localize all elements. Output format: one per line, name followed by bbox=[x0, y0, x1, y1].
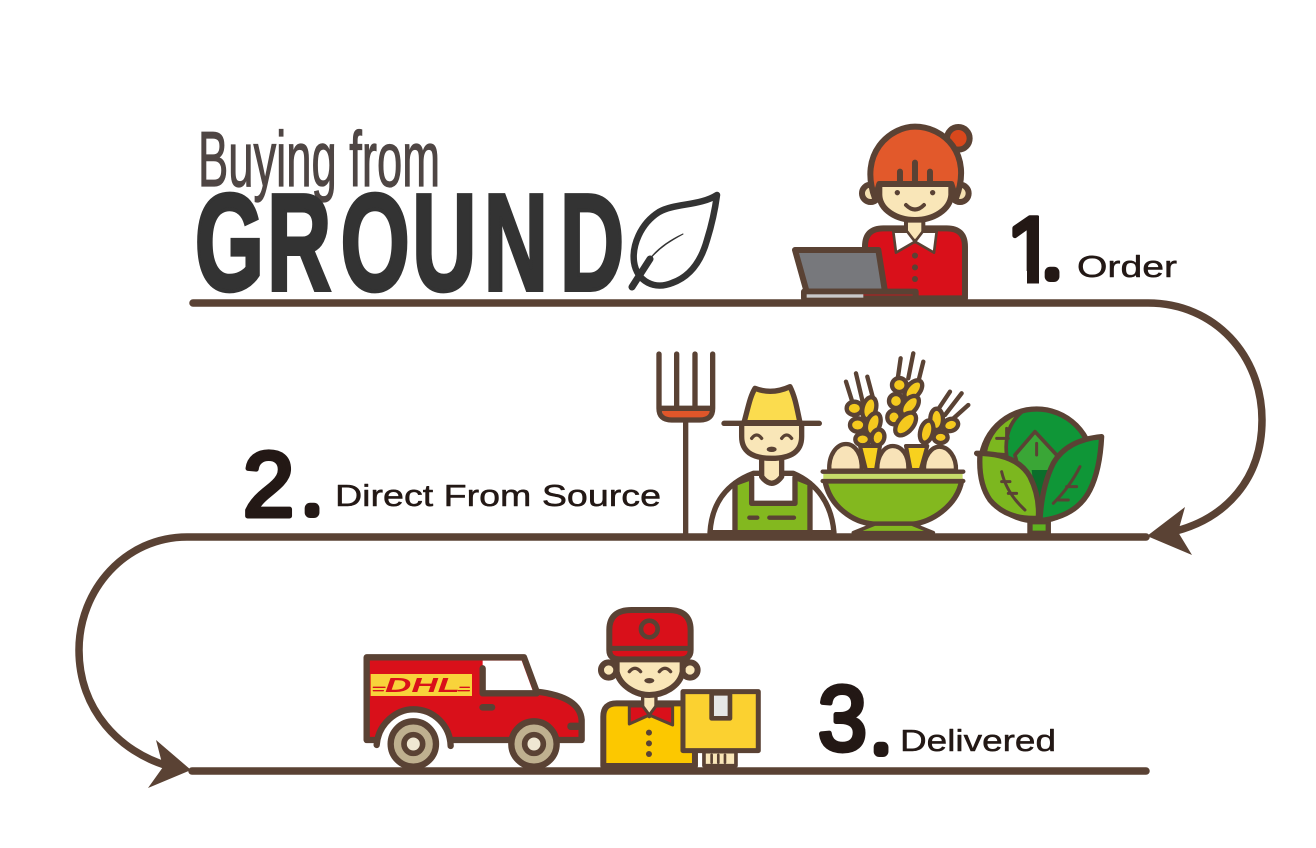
arrowhead: right curve bbox=[1147, 507, 1192, 555]
icon: DHL delivery van bbox=[367, 657, 582, 767]
number 3: 3 bbox=[818, 668, 867, 770]
collar bbox=[629, 706, 673, 725]
icon: woman at laptop bbox=[795, 127, 970, 298]
parcel tape bbox=[712, 693, 730, 718]
rear wheel bbox=[391, 721, 436, 767]
step 3 label bbox=[818, 668, 1056, 770]
title line: Buying from: Buying from bbox=[198, 115, 440, 203]
icon: leaf bbox=[632, 195, 717, 287]
number 3 dot: . bbox=[876, 716, 887, 760]
number 1 dot: . bbox=[1046, 242, 1058, 286]
bowl foot bbox=[853, 524, 933, 533]
step 1 label bbox=[1012, 215, 1177, 284]
wheat stalks bbox=[846, 353, 968, 447]
cabbage bbox=[977, 409, 1102, 533]
neck bbox=[643, 693, 656, 717]
text: Delivered: Delivered bbox=[900, 723, 1056, 758]
eggs bbox=[829, 444, 862, 471]
buttons bbox=[646, 730, 652, 736]
infographic canvas bbox=[75, 124, 1266, 788]
face bbox=[879, 184, 951, 220]
pitchfork bbox=[659, 354, 713, 533]
laptop base bbox=[804, 292, 916, 298]
hand under parcel bbox=[704, 752, 736, 766]
headlight bbox=[567, 723, 581, 730]
DHL logo text: DHL bbox=[385, 674, 460, 697]
text: Direct From Source: Direct From Source bbox=[335, 478, 661, 513]
buttons bbox=[912, 253, 918, 259]
step 2 label bbox=[243, 434, 661, 536]
window bbox=[483, 661, 533, 691]
DHL speed lines bbox=[373, 687, 469, 691]
arrowhead: left curve bbox=[148, 740, 191, 788]
body bbox=[865, 228, 965, 298]
face bbox=[617, 657, 683, 695]
face bbox=[742, 423, 802, 458]
DHL stripe bbox=[371, 674, 472, 696]
ears bbox=[601, 662, 616, 678]
door handle bbox=[479, 704, 495, 711]
hat bbox=[744, 387, 800, 423]
bowl bbox=[825, 481, 962, 524]
path: middle line and left curve bbox=[79, 537, 1146, 766]
number 2 dot: . bbox=[306, 478, 318, 522]
hair bun bbox=[947, 127, 970, 150]
parcel bbox=[683, 692, 758, 751]
number 2: 2 bbox=[243, 434, 294, 536]
front wheel bbox=[511, 721, 557, 767]
collar bbox=[893, 232, 937, 253]
fringe bbox=[900, 163, 930, 183]
path: top line and right curve bbox=[193, 303, 1262, 531]
process path with arrows bbox=[79, 303, 1262, 788]
neck bbox=[906, 221, 923, 242]
title line: GROUND: GROUND bbox=[195, 165, 624, 320]
laptop screen bbox=[795, 250, 885, 292]
text: Order: Order bbox=[1077, 249, 1177, 284]
body bbox=[603, 703, 695, 766]
cap bbox=[609, 610, 691, 659]
number 1: 1 bbox=[1006, 199, 1057, 301]
hair bbox=[870, 127, 961, 198]
icon: delivery person with parcel bbox=[601, 610, 758, 766]
facial features bbox=[895, 190, 900, 195]
ears bbox=[862, 185, 879, 202]
yellow grain behind eggs bbox=[860, 446, 927, 470]
shirt and arms bbox=[710, 473, 834, 533]
title bbox=[195, 115, 624, 320]
overalls bbox=[735, 477, 810, 533]
rear wheel arch bbox=[377, 709, 451, 767]
neck bbox=[762, 457, 782, 483]
icon group: farm bbox=[659, 353, 1102, 533]
farmer bbox=[710, 387, 834, 533]
path: bottom line bbox=[192, 767, 1146, 775]
van body bbox=[367, 657, 582, 740]
